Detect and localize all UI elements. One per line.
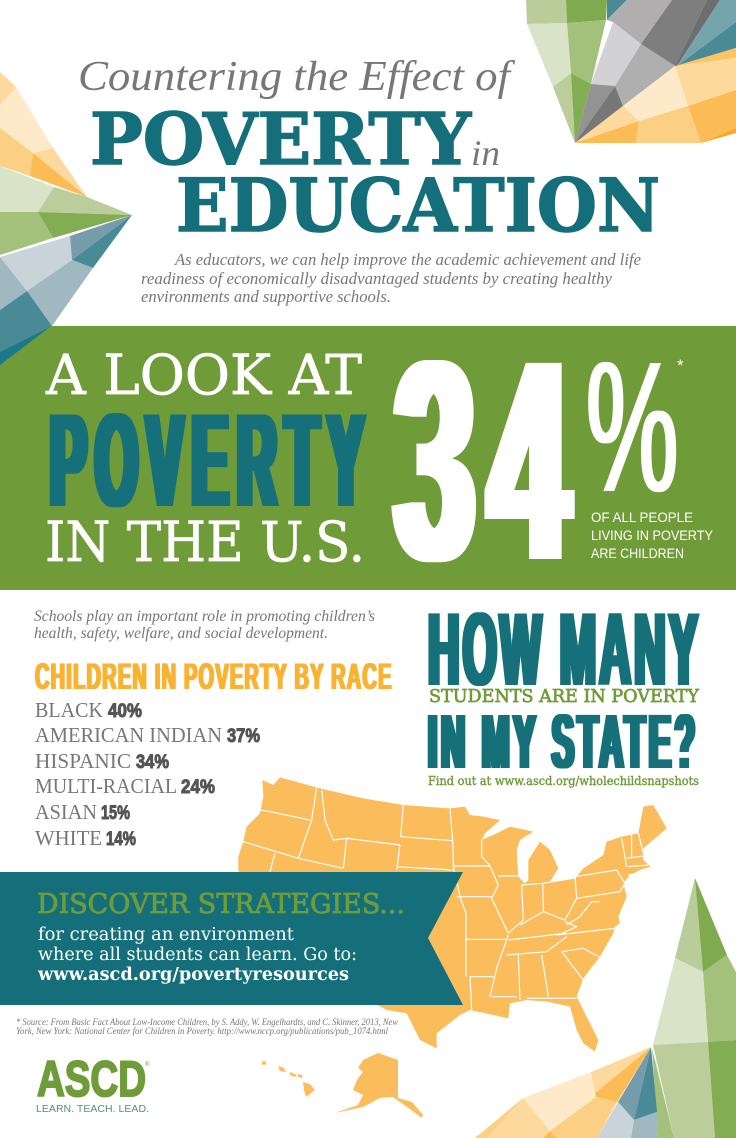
list: poverty by race: AMERICAN INDIAN bbox=[35, 723, 222, 747]
footnote: source bbox=[16, 1018, 399, 1037]
title: in bbox=[471, 133, 500, 173]
text: schools role: health, safety, welfare, and social development. bbox=[34, 625, 328, 642]
icon: left crystal bbox=[0, 72, 132, 326]
heading: a look at poverty in the u.s.: A LOOK AT bbox=[45, 343, 362, 407]
heading: a look at poverty in the u.s.: POVERTY bbox=[50, 386, 364, 535]
list: poverty by race: ASIAN bbox=[35, 800, 97, 824]
list: poverty by race: 24% bbox=[181, 777, 215, 798]
callout: how many students: IN MY STATE? bbox=[428, 698, 695, 785]
list: poverty by race: 34% bbox=[136, 752, 169, 773]
stat caption bbox=[591, 510, 713, 561]
callout: how many students: Find out at www.ascd.org/wholechildsnapshots bbox=[428, 774, 699, 788]
stat caption: ARE CHILDREN bbox=[591, 546, 684, 561]
banner: discover strategies bbox=[0, 872, 463, 1005]
list: poverty by race bbox=[35, 698, 260, 850]
intro text: environments and supportive schools. bbox=[141, 287, 391, 306]
stat caption: OF ALL PEOPLE bbox=[591, 510, 693, 525]
state borders bbox=[243, 788, 648, 1010]
stat caption: LIVING IN POVERTY bbox=[591, 528, 713, 543]
panel: green poverty band bbox=[0, 291, 736, 620]
heading: a look at poverty in the u.s. bbox=[45, 343, 365, 574]
statistic: 34 percent bbox=[395, 301, 684, 620]
list: poverty by race: 15% bbox=[101, 803, 130, 824]
list: poverty by race: 40% bbox=[108, 701, 142, 722]
heading: children in poverty by race: CHILDREN IN POVERTY BY RACE bbox=[35, 657, 391, 698]
footnote: source: * Source: From Basic Fact About Low-Income Children, by S. Addy, W. Engelhardts, and C. Skinner, 2013, New bbox=[16, 1018, 399, 1028]
title bbox=[78, 54, 660, 249]
statistic: 34 percent: * bbox=[677, 356, 684, 375]
logo: ascd: ASCD bbox=[37, 1051, 146, 1107]
title: POVERTY bbox=[90, 97, 472, 181]
callout: how many students: HOW MANY bbox=[428, 591, 698, 707]
callout: how many students: STUDENTS ARE IN POVERTY bbox=[429, 687, 699, 707]
callout: how many students bbox=[428, 591, 699, 788]
intro text bbox=[141, 250, 641, 306]
statistic: 34 percent: 34 bbox=[395, 301, 569, 620]
statistic: 34 percent: % bbox=[586, 323, 678, 530]
list: poverty by race: BLACK bbox=[35, 698, 103, 722]
intro text: readiness of economically disadvantaged students by creating healthy bbox=[141, 269, 613, 288]
list: poverty by race: 37% bbox=[227, 726, 260, 747]
list: poverty by race: 14% bbox=[106, 829, 136, 850]
icon: bottom-right crystal bbox=[475, 878, 736, 1138]
title: EDUCATION bbox=[176, 163, 660, 249]
list: poverty by race: MULTI-RACIAL bbox=[35, 774, 177, 798]
footnote: source: York, New York: National Center for Children in Poverty. http://www.nccp.org/publications/pub_1074.html bbox=[16, 1026, 388, 1037]
list: poverty by race: WHITE bbox=[35, 826, 102, 850]
banner: discover strategies: DISCOVER STRATEGIES... bbox=[37, 889, 405, 920]
map: united states bbox=[238, 777, 667, 1052]
icon: top-right crystal bbox=[526, 0, 736, 143]
text: schools role bbox=[34, 608, 375, 642]
heading: a look at poverty in the u.s.: IN THE U.S. bbox=[45, 510, 365, 574]
text: schools role: Schools play an important role in promoting children’s bbox=[34, 608, 375, 625]
title: Countering the Effect of bbox=[78, 54, 516, 100]
banner: discover strategies: where all students can learn. Go to: bbox=[38, 945, 357, 965]
logo: ascd: ® bbox=[145, 1061, 150, 1068]
logo: ascd: LEARN. TEACH. LEAD. bbox=[36, 1103, 149, 1115]
banner: discover strategies: for creating an environment bbox=[38, 925, 294, 945]
intro text: As educators, we can help improve the academic achievement and life bbox=[174, 250, 641, 269]
list: poverty by race: HISPANIC bbox=[35, 749, 131, 773]
banner: discover strategies: www.ascd.org/povertyresources bbox=[37, 965, 349, 985]
map: hawaii bbox=[262, 1061, 315, 1097]
map: alaska bbox=[335, 1053, 423, 1118]
